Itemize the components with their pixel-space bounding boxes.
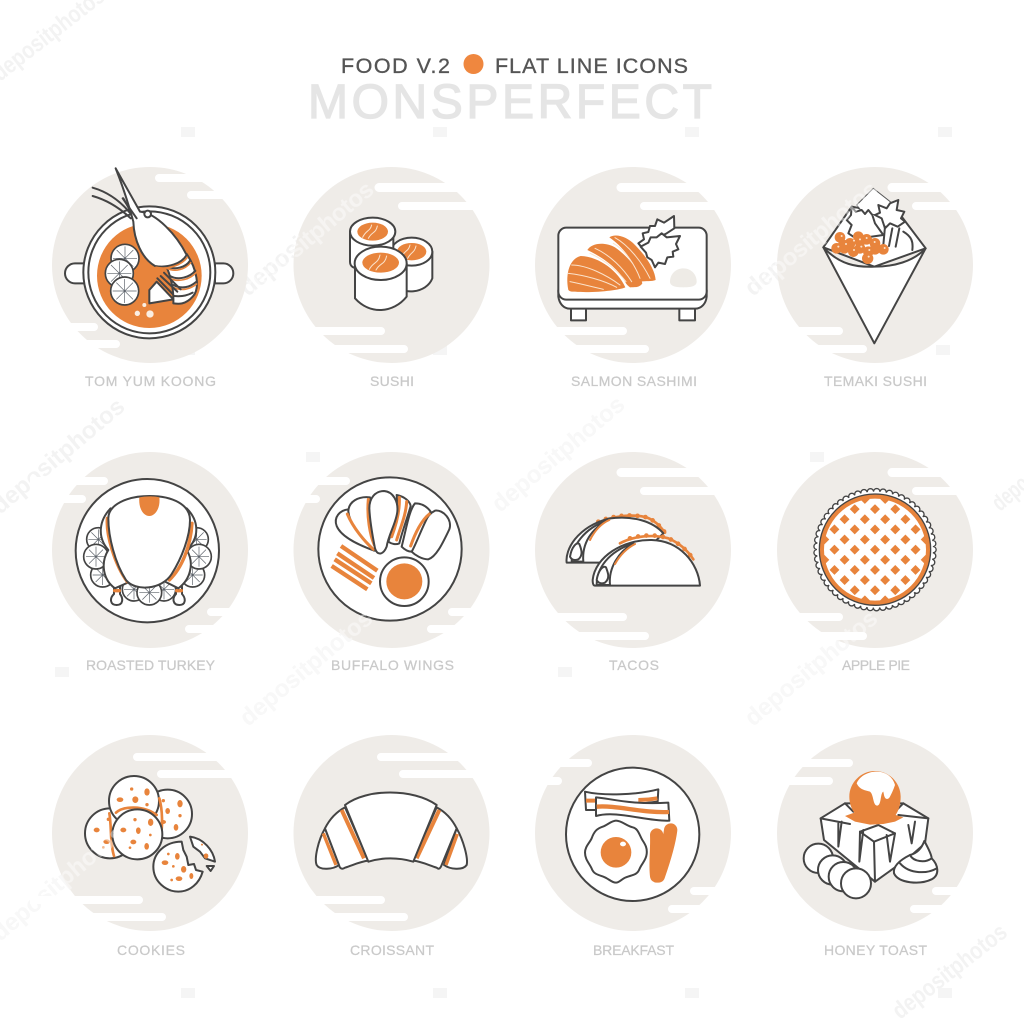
background circle (294, 452, 490, 648)
bacon front (596, 797, 669, 821)
stripes (520, 759, 754, 913)
right roll (391, 252, 432, 291)
icon: cookies (85, 776, 215, 892)
centre segment (345, 792, 437, 862)
panel: salmon sashimi (520, 167, 744, 389)
toast edges (821, 803, 928, 882)
shrimp tail (165, 254, 197, 304)
panel: tom yum koong (30, 167, 271, 389)
back taco crust (592, 516, 665, 533)
cookie chip (190, 837, 215, 862)
panel: breakfast (520, 735, 754, 958)
front roll (355, 263, 407, 310)
fries (332, 546, 377, 589)
watermark: depositphotos (740, 605, 883, 732)
plate (566, 768, 699, 901)
left leaf (847, 207, 883, 237)
panel: tacos (520, 452, 744, 673)
icon: sashimi tray (558, 216, 707, 320)
turkey wings (101, 508, 196, 588)
shrimp eye (144, 211, 151, 217)
icon: sushi rolls (350, 218, 432, 310)
lime slices (105, 244, 139, 305)
label: TACOS (609, 657, 659, 673)
turkey body (108, 496, 190, 588)
top leaf (857, 188, 892, 215)
stripes (760, 183, 996, 353)
orange dot (464, 54, 484, 74)
background circle (535, 735, 731, 931)
turkey legs (111, 587, 185, 605)
icon: turkey on plate (76, 479, 219, 622)
label: CROISSANT (350, 942, 434, 958)
tray top (558, 228, 707, 300)
right leaf (875, 200, 905, 228)
tray legs (571, 308, 695, 320)
broken cookie (153, 842, 203, 892)
icon: buffalo wings plate (318, 477, 462, 621)
label: APPLE PIE (842, 657, 910, 673)
back roll (350, 232, 393, 268)
antennae (93, 188, 132, 218)
turkey shadow (107, 518, 192, 582)
icon: shrimp soup (65, 168, 233, 338)
background circle (52, 735, 248, 931)
label: TOM YUM KOONG (85, 373, 216, 389)
background circle (52, 167, 248, 363)
panel: apple pie (760, 452, 996, 673)
right tip (444, 828, 467, 869)
label: COOKIES (117, 942, 185, 958)
wedge (149, 282, 173, 303)
leaves (638, 216, 674, 248)
cream swirl (894, 841, 937, 883)
title line: FOOD V.2 (341, 54, 450, 78)
background circle (777, 735, 973, 931)
salmon roe (831, 231, 889, 264)
background circle (777, 452, 973, 648)
label: SUSHI (370, 373, 414, 389)
left tip (316, 828, 339, 869)
toast balls (804, 844, 833, 873)
panel: roasted turkey (30, 452, 271, 673)
tray base (558, 290, 707, 309)
front cookie (112, 809, 162, 859)
stripes (30, 477, 271, 633)
watermark overlay: depositphotos (740, 605, 883, 732)
stripes (280, 753, 503, 921)
watermark: depositphotos (235, 605, 378, 732)
front taco (593, 540, 700, 586)
lemon slices (84, 528, 211, 605)
watermark: depositphotos (487, 391, 630, 518)
watermark overlay (0, 176, 883, 947)
shrimp legs (157, 273, 181, 294)
salmon slices (609, 236, 656, 282)
crust ring (819, 494, 931, 605)
cone (823, 247, 926, 343)
shadows on segments (342, 810, 439, 858)
ice cream (845, 771, 903, 825)
panel: temaki sushi (760, 167, 996, 389)
stripes (30, 174, 271, 348)
roe highlights (837, 235, 886, 258)
background circle (535, 167, 731, 363)
icon: croissant (316, 792, 467, 869)
icon: apple pie (813, 488, 937, 612)
label: ROASTED TURKEY (86, 657, 216, 673)
stripes (520, 183, 744, 353)
icon: breakfast plate (566, 768, 699, 901)
label: HONEY TOAST (824, 942, 927, 958)
toast (821, 803, 928, 882)
subtitle text: FLAT LINE ICONS (495, 54, 688, 78)
plate (318, 477, 462, 621)
wings (412, 511, 450, 559)
shrimp tail bands (167, 263, 197, 289)
background circle (294, 735, 490, 931)
rice ball (670, 268, 697, 287)
background circle (52, 452, 248, 648)
dip bowl (380, 557, 429, 606)
icon: honey toast (804, 771, 937, 898)
yolk (601, 837, 631, 868)
label: SALMON SASHIMI (571, 373, 697, 389)
icing (857, 772, 895, 806)
watermark overlay: depositphotos (744, 176, 883, 300)
icon: temaki cone (823, 188, 926, 343)
panel: croissant (280, 735, 503, 958)
background circle (535, 452, 731, 648)
stripes (30, 753, 267, 921)
syrup drips (838, 822, 915, 862)
label: BREAKFAST (593, 942, 674, 958)
label: TEMAKI SUSHI (824, 373, 927, 389)
watermark: depositphotos (740, 175, 883, 302)
stripes (760, 468, 996, 640)
soup (97, 223, 202, 328)
pot handles (65, 263, 233, 283)
title line (341, 54, 688, 78)
back taco (567, 518, 663, 563)
panel: honey toast (760, 735, 996, 958)
stems (883, 227, 913, 250)
panel: sushi (280, 167, 502, 389)
cookies behind (85, 808, 135, 858)
back wrap (823, 207, 926, 267)
stripes (520, 468, 744, 640)
sausages (656, 830, 671, 876)
watermark overlay: depositphotos (235, 605, 378, 732)
front taco crust (620, 536, 693, 559)
watermark: depositphotos (235, 175, 378, 302)
background circle (777, 167, 973, 363)
stripes (280, 183, 502, 353)
watermark overlay: depositphotos (240, 176, 379, 300)
bubbles (135, 303, 154, 318)
label: BUFFALO WINGS (331, 657, 454, 673)
stripes (760, 759, 996, 913)
shadows on tips (323, 833, 457, 865)
panel: cookies (30, 735, 267, 958)
plate (76, 479, 219, 622)
bacon back (585, 789, 658, 810)
background circle (294, 167, 490, 363)
middle segments (325, 807, 368, 869)
salmon lines (568, 238, 650, 289)
watermark overlay: depositphotos (487, 391, 630, 518)
icon: tacos (567, 515, 700, 586)
turkey tail (139, 496, 160, 516)
orange shadows (109, 798, 162, 856)
brand heading: MONSPERFECT (308, 76, 712, 129)
panel: buffalo wings (280, 452, 512, 673)
scalloped edge (817, 492, 933, 608)
lattice (824, 498, 926, 601)
chocolate chips (94, 787, 208, 881)
stripes (280, 477, 512, 633)
egg (585, 821, 647, 883)
shrimp head (116, 168, 187, 267)
